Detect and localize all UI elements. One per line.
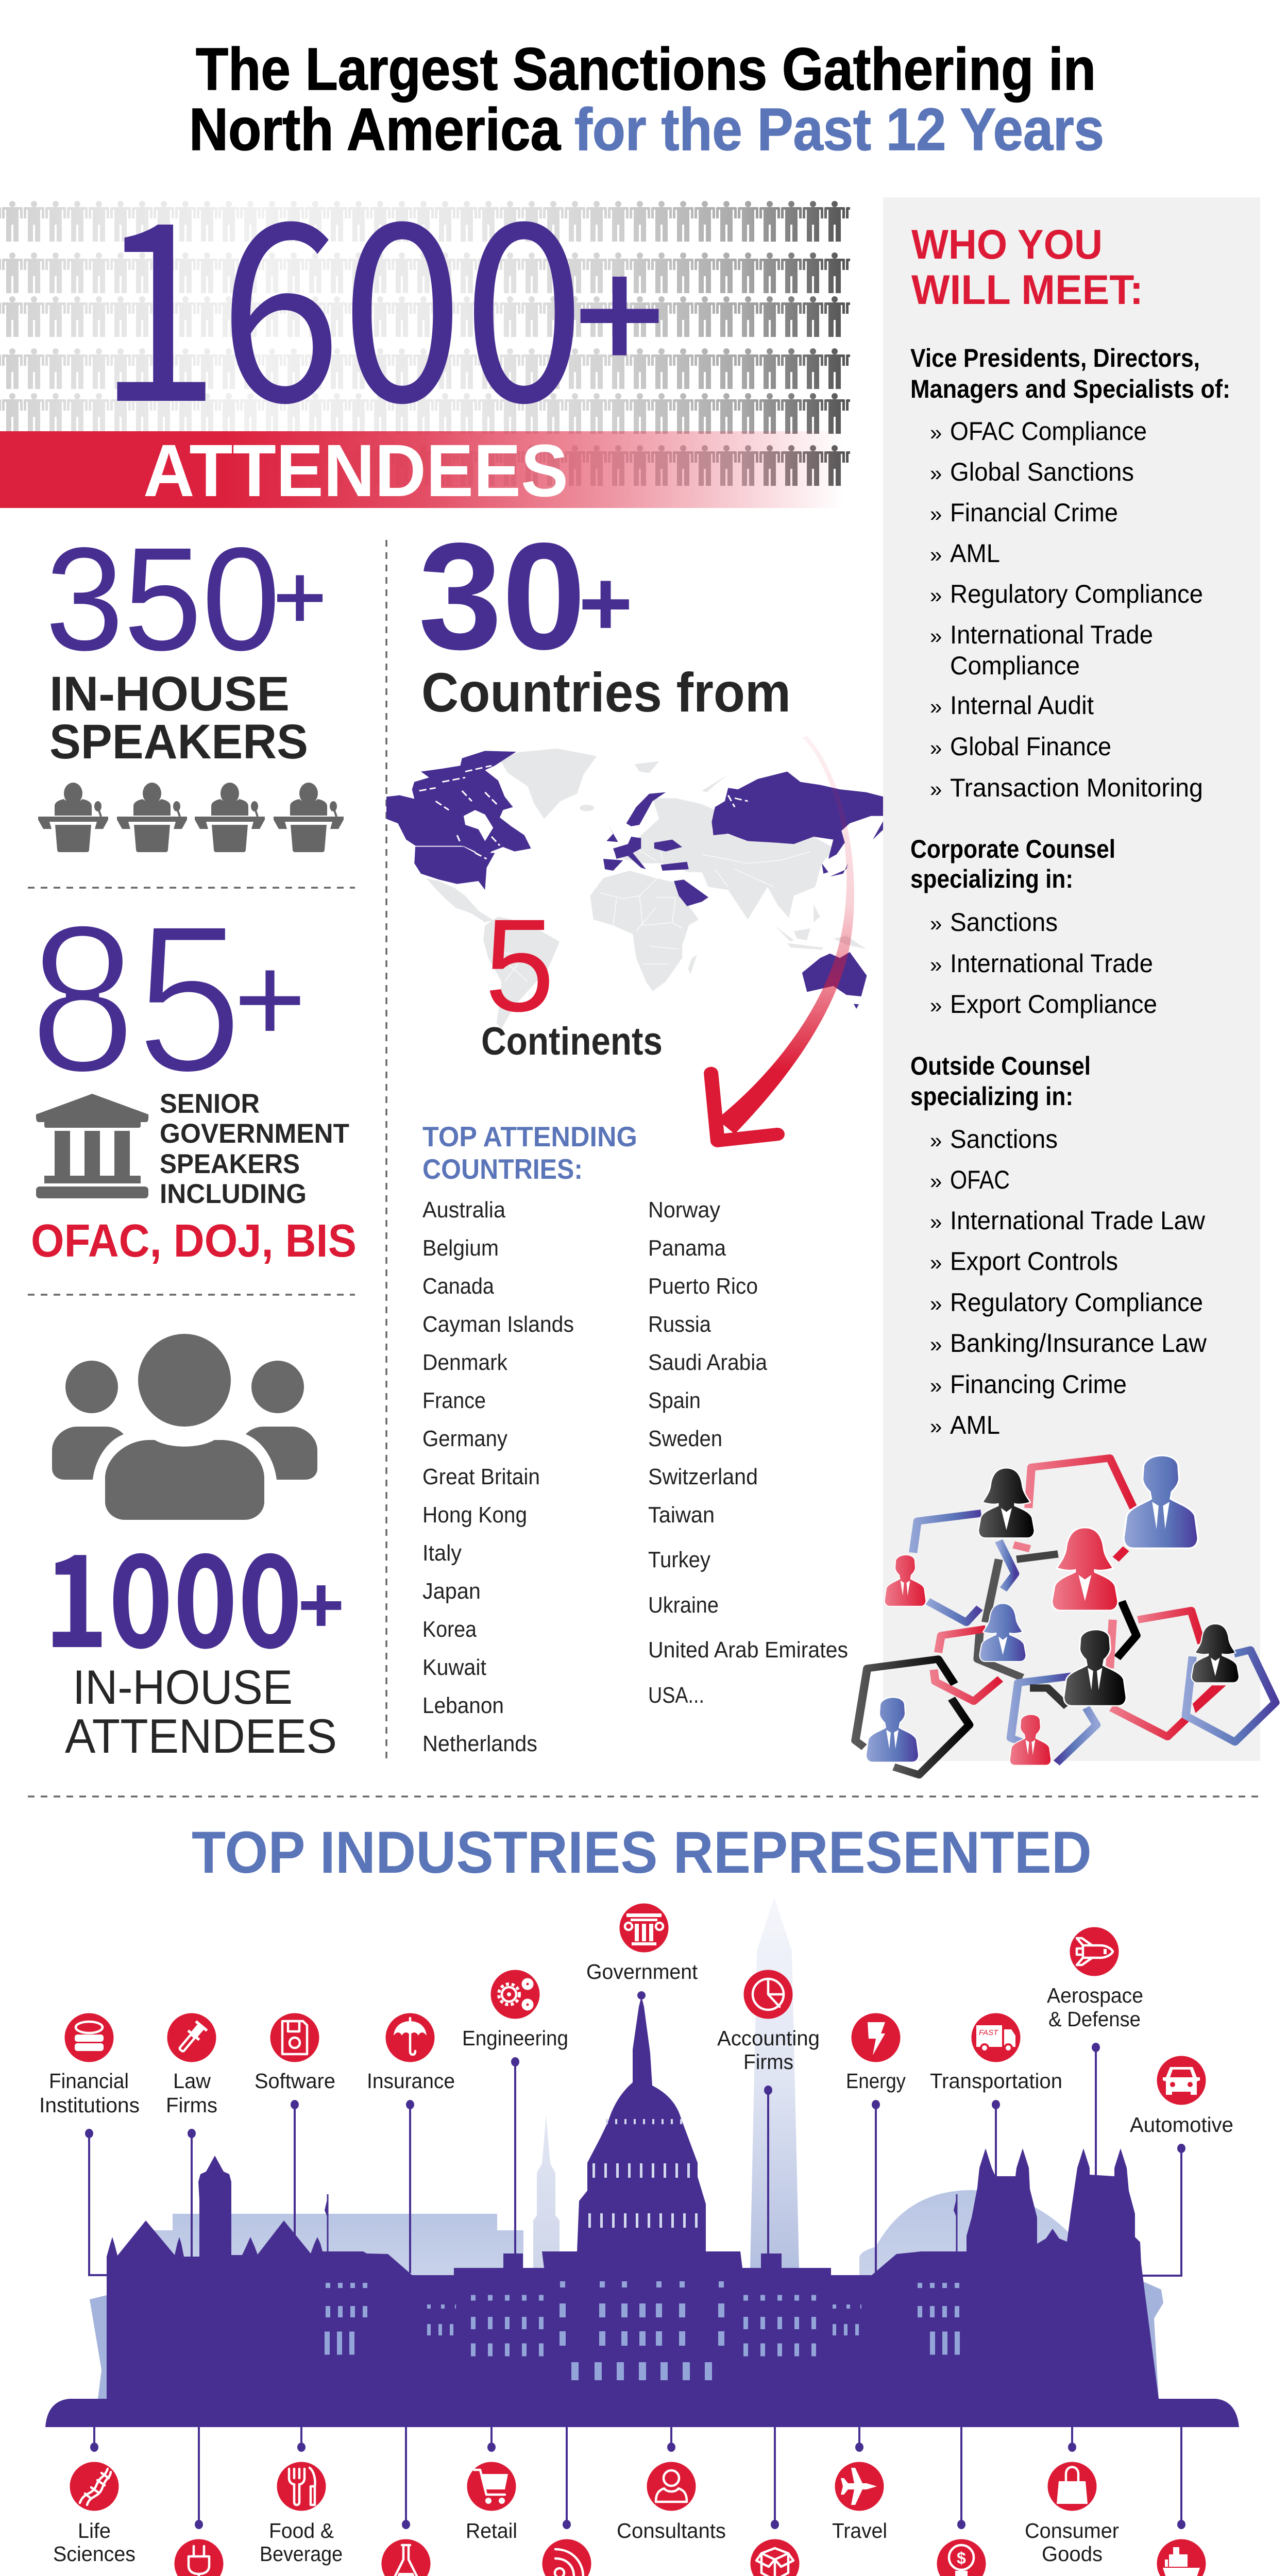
stat: 1000+ in-house attendees: IN-HOUSE [73,1660,293,1714]
list: countries column two [648,1197,848,1708]
industry: life sciences [53,2462,135,2566]
list: outside counsel specialties: OFAC [950,1165,1010,1194]
person: dark man [1064,1630,1126,1705]
illustration: professional network [855,1456,1276,1775]
list: outside counsel specialties: International Trade Law [950,1206,1206,1235]
stat: 350+ in-house speakers: 350 [45,517,280,681]
list: countries column one: Australia [422,1197,505,1223]
stat: 5 continents [481,892,663,1063]
text: OFAC, DOJ, BIS: OFAC, DOJ, BIS [31,1215,357,1267]
stat: 30+ countries from: + [579,552,633,655]
person: small red man bottom [1010,1715,1050,1765]
industry: consumer goods: Goods [1042,2542,1103,2566]
industry: transportation [930,2013,1062,2093]
world map [386,736,884,1141]
list: roles [930,417,1203,802]
attendee crowd pictogram [0,198,850,489]
list: corporate counsel specialties: » [930,993,942,1018]
list: outside counsel specialties: » [930,1374,942,1398]
industry: automotive: Automotive [1130,2113,1233,2137]
industry: financial institutions: Institutions [39,2093,140,2117]
stat: 30+ countries from [418,511,791,723]
industry: consultants: Consultants [617,2519,726,2543]
industry: food and beverage: Beverage [260,2542,343,2566]
list: outside counsel specialties: Financing Crime [950,1370,1127,1399]
list: roles: Transaction Monitoring [950,773,1203,802]
industry: electronics [149,2539,249,2576]
industry: financial institutions [39,2013,140,2117]
industry: travel: Travel [832,2519,887,2543]
list: countries column two: Sweden [648,1426,722,1451]
list: countries column two: USA... [648,1683,704,1708]
capitol building silhouette [45,1991,1239,2427]
stat: 1600+ attendees: + [574,227,665,400]
attendees ribbon [0,431,845,508]
industry: logistics and distribution [1129,2539,1234,2576]
industry: consumer goods: Consumer [1025,2519,1119,2543]
list: roles: » [930,694,942,719]
title: for the Past 12 Years [574,96,1104,163]
industry: law firms [166,2013,217,2117]
list: countries column two: Panama [648,1235,726,1261]
subheading: vice presidents [910,344,1230,403]
list: outside counsel specialties: Sanctions [950,1125,1058,1154]
text: senior government speakers including: SENIOR [160,1089,260,1119]
list: roles: » [930,502,942,526]
list: countries column two: Switzerland [648,1464,758,1489]
list: countries column one: Netherlands [422,1731,537,1756]
list: roles: Global Sanctions [950,457,1134,486]
list: roles: » [930,461,942,485]
list: roles: » [930,777,942,801]
heading: who you will meet: WILL MEET: [911,267,1143,313]
list: countries column one: Korea [422,1617,477,1642]
industry: investment management [901,2539,1023,2576]
industry: retail: Retail [466,2519,517,2543]
person: blue man bottom left [867,1698,918,1761]
icon: group of people [52,1334,317,1520]
list: roles: Compliance [950,651,1080,680]
industry: aerospace and defense: & Defense [1048,2007,1141,2031]
connector dots upper [85,2043,1185,2153]
stat: 350+ in-house speakers [45,517,326,769]
stat: 1000+ in-house attendees [44,1499,345,1763]
list: countries column one: Kuwait [422,1655,486,1680]
industry: retail [466,2462,517,2543]
subheading: corporate counsel: Corporate Counsel [910,835,1115,863]
list: countries column one: Cayman Islands [422,1312,574,1337]
person: red woman [1053,1528,1117,1609]
stat: 1600+ attendees: ATTENDEES [143,429,568,512]
list: roles: Regulatory Compliance [950,580,1203,608]
list: roles: AML [950,539,1000,568]
person: blue man top [1125,1456,1197,1548]
industry: insurance [367,2013,455,2093]
list: outside counsel specialties: » [930,1128,942,1153]
stat: 30+ countries from: Countries from [421,661,791,723]
industry: insurance: Insurance [367,2069,455,2093]
list: roles: » [930,420,942,445]
list: corporate counsel specialties: International Trade [950,949,1153,978]
industry: financial institutions: Financial [49,2069,129,2093]
list: countries column one [422,1197,574,1756]
list: outside counsel specialties [930,1125,1207,1439]
heading: top attending countries: COUNTRIES: [422,1153,583,1185]
industry: investment management: $ [957,2549,966,2567]
list: roles: OFAC Compliance [950,417,1147,446]
industry: consultants [617,2462,726,2543]
industry: life sciences: Life [78,2519,111,2543]
heading: who you will meet [911,222,1143,313]
stat: 1000+ in-house attendees: + [298,1560,345,1649]
industry: engineering [462,1970,568,2050]
list: countries column two: Turkey [648,1547,710,1572]
list: countries column one: Lebanon [422,1693,504,1718]
list: countries column one: Denmark [422,1350,508,1375]
text: senior government speakers including: INCLUDING [160,1179,307,1209]
stat: 1000+ in-house attendees: ATTENDEES [65,1709,337,1763]
stat: 5 continents: Continents [481,1020,663,1063]
subheading: outside counsel [910,1052,1091,1111]
industry: transportation: FAST [979,2028,999,2037]
list: countries column one: Great Britain [422,1464,540,1489]
list: outside counsel specialties: » [930,1414,942,1438]
title: North America [189,96,561,163]
connector lines upper [89,2047,1181,2276]
list: countries column two: Ukraine [648,1592,719,1618]
list: countries column one: Japan [422,1579,481,1604]
stat: 350+ in-house speakers: IN-HOUSE [49,667,290,721]
stat: 30+ countries from: 30 [418,511,586,681]
list: roles: Internal Audit [950,691,1094,720]
list: countries column one: Canada [422,1274,494,1299]
heading: top attending countries: TOP ATTENDING [422,1121,637,1153]
industry: shipping [735,2539,815,2576]
industry: government [586,1903,698,1984]
list: countries column two: Russia [648,1312,711,1337]
stat: 350+ in-house speakers: + [274,547,326,648]
stat: 85+ government speakers: 85 [29,880,243,1116]
list: corporate counsel specialties [930,908,1157,1019]
stat: 85+ government speakers: + [234,930,306,1068]
list: outside counsel specialties: » [930,1210,942,1234]
industry: consumer goods [1025,2462,1119,2566]
list: corporate counsel specialties: » [930,953,942,977]
industry: law firms: Law [173,2069,211,2093]
industry: accounting firms [717,1970,820,2074]
list: roles: International Trade [950,620,1153,649]
industry: accounting firms: Firms [743,2050,793,2074]
list: outside counsel specialties: Regulatory Compliance [950,1288,1203,1317]
industry: chemicals [358,2539,454,2576]
subheading: corporate counsel [910,835,1115,893]
subheading: outside counsel: Outside Counsel [910,1052,1091,1080]
list: countries column one: France [422,1388,486,1413]
list: outside counsel specialties: Export Controls [950,1247,1118,1276]
industry: software [255,2013,335,2093]
list: roles: » [930,583,942,607]
list: outside counsel specialties: » [930,1292,942,1316]
list: countries column two: Taiwan [648,1502,715,1528]
industry: food and beverage: Food & [269,2519,334,2543]
industry: law firms: Firms [166,2093,217,2117]
list: roles: Global Finance [950,732,1111,761]
list: countries column two: United Arab Emirates [648,1637,848,1663]
stat: 350+ in-house speakers: SPEAKERS [49,715,308,769]
stat: 5 continents: 5 [485,892,554,1039]
list: countries column one: Belgium [422,1235,499,1261]
panel: who you will meet [883,197,1260,1761]
list: corporate counsel specialties: Export Compliance [950,990,1157,1019]
list: corporate counsel specialties: Sanctions [950,908,1058,937]
background skyline [90,1897,1163,2399]
subheading: corporate counsel: specializing in: [910,865,1073,893]
industry: accounting firms: Accounting [717,2026,820,2050]
industry: automotive [1130,2056,1233,2137]
heading: top industries represented: TOP INDUSTRIES REPRESENTED [192,1820,1092,1886]
person: small red man [885,1555,925,1606]
text: senior government speakers including [160,1089,349,1209]
subheading: vice presidents: Managers and Specialists of: [910,375,1230,403]
industry: engineering: Engineering [462,2026,568,2050]
list: countries column one: Italy [422,1540,462,1566]
icon: government building [36,1094,148,1198]
list: countries column two: Norway [648,1197,720,1223]
industry: travel [832,2462,887,2543]
list: countries column two: Puerto Rico [648,1274,758,1299]
list: outside counsel specialties: » [930,1250,942,1275]
industry: government: Government [586,1960,698,1984]
stat: 1000+ in-house attendees: 1000 [44,1499,302,1684]
industry: aerospace and defense: Aerospace [1047,1984,1143,2007]
list: countries column two: Spain [648,1388,701,1413]
industry: telecom [528,2539,606,2576]
icon: speakers at podiums [38,783,344,852]
stat: 1600+ attendees: 1600 [98,114,585,472]
list: roles: » [930,736,942,760]
list: outside counsel specialties: AML [950,1411,1000,1439]
industry: software: Software [255,2069,335,2093]
list: countries column two: Saudi Arabia [648,1350,767,1375]
industry: energy [846,2013,906,2093]
title [189,36,1104,163]
person: dark woman right [1192,1624,1239,1682]
list: roles: » [930,543,942,567]
text: senior government speakers including: GOVERNMENT [160,1118,349,1149]
arrow: curved red arrow [711,736,854,1141]
industry: food and beverage [260,2462,343,2566]
list: countries column one: Germany [422,1426,507,1451]
text: senior government speakers including: SPEAKERS [160,1149,300,1179]
list: roles: » [930,624,942,648]
industry: transportation: Transportation [930,2069,1062,2093]
industry: aerospace and defense [1047,1927,1143,2031]
list: corporate counsel specialties: » [930,911,942,936]
person: dark woman [979,1469,1034,1537]
connector lines lower [94,2427,1181,2524]
subheading: vice presidents: Vice Presidents, Directors, [910,344,1200,372]
title: The Largest Sanctions Gathering in [196,36,1096,103]
list: countries column one: Hong Kong [422,1502,527,1528]
connector dots lower [90,2443,1185,2529]
person: blue woman [980,1604,1025,1661]
industry: energy: Energy [846,2069,906,2093]
subheading: outside counsel: specializing in: [910,1082,1073,1111]
list: outside counsel specialties: » [930,1169,942,1193]
list: roles: Financial Crime [950,498,1118,527]
heading: top attending countries [422,1121,637,1185]
industry: life sciences: Sciences [53,2542,135,2566]
list: outside counsel specialties: Banking/Insurance Law [950,1329,1207,1358]
heading: who you will meet: WHO YOU [911,222,1103,268]
list: outside counsel specialties: » [930,1332,942,1357]
